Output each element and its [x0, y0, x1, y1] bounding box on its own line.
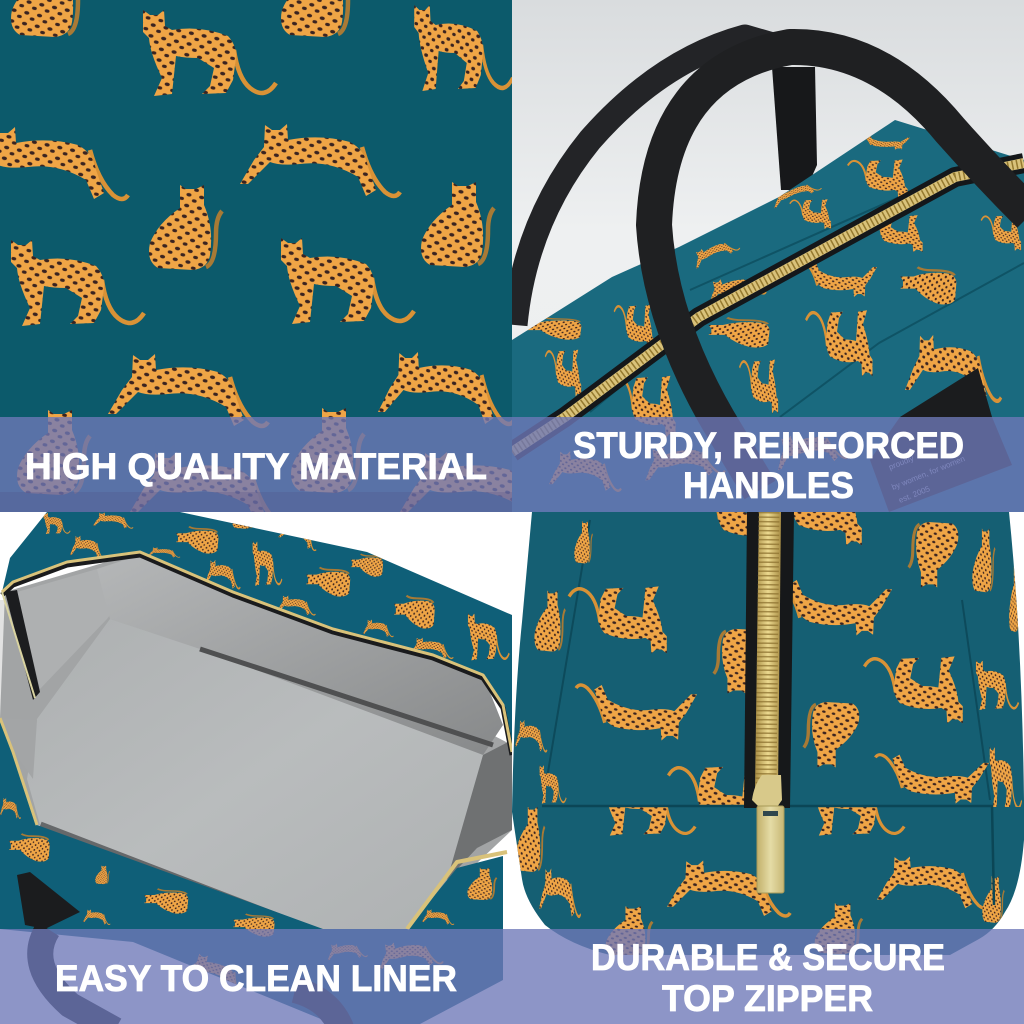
zipper pull: [752, 775, 784, 893]
caption: [573, 425, 964, 506]
zipper edges: [0, 552, 512, 929]
leopard print upper: [515, 478, 1022, 957]
leopard print on bag: [525, 135, 1021, 491]
caption: DURABLE & SECURE: [591, 937, 945, 978]
panel: top zipper: [512, 512, 1024, 955]
lining base: [0, 559, 512, 896]
banner: top zipper: [512, 929, 1024, 1024]
zipper teeth: [755, 512, 781, 790]
back handle: [515, 37, 790, 325]
lining right wall: [447, 740, 512, 880]
front handle: [654, 47, 1024, 490]
caption: HIGH QUALITY MATERIAL: [25, 446, 487, 487]
lining floor: [27, 619, 483, 929]
brand label: by women, for women: [890, 454, 966, 492]
carry handle base: [17, 872, 80, 929]
panel: easy to clean liner: [0, 501, 512, 1024]
caption: HANDLES: [683, 465, 854, 506]
brand label: est. 2005: [897, 484, 932, 505]
back handle strap: [772, 67, 817, 190]
panel: sturdy handles: [512, 0, 1024, 512]
top zipper: [512, 163, 1024, 452]
bag body: [512, 120, 1024, 512]
banner: easy to clean liner: [0, 929, 512, 1024]
caption: [591, 937, 945, 1019]
panel: high quality material: [0, 0, 512, 512]
brand label: proudly: [887, 454, 915, 472]
bag body: [512, 512, 1024, 955]
bottom seam: [542, 806, 994, 905]
fabric folds: [590, 196, 1024, 417]
black side band: [5, 590, 40, 700]
banner: high quality material: [0, 417, 512, 512]
caption: STURDY, REINFORCED: [573, 425, 964, 466]
bag fabric: [0, 512, 512, 1024]
caption: EASY TO CLEAN LINER: [55, 958, 457, 999]
lining back wall: [97, 555, 503, 755]
floor front shadow: [40, 822, 282, 914]
lining corner: [28, 721, 37, 778]
carry handle: [40, 929, 345, 1024]
side panel seams: [545, 520, 990, 800]
lining left wall: [18, 569, 109, 688]
zipper tape: [744, 512, 794, 808]
caption: TOP ZIPPER: [662, 978, 873, 1019]
leopard print on bag: [0, 501, 509, 995]
floor seam crease: [200, 649, 493, 745]
banner: sturdy handles: [512, 417, 1024, 512]
leopard print pattern: [0, 0, 512, 512]
brand label: [870, 368, 1012, 512]
